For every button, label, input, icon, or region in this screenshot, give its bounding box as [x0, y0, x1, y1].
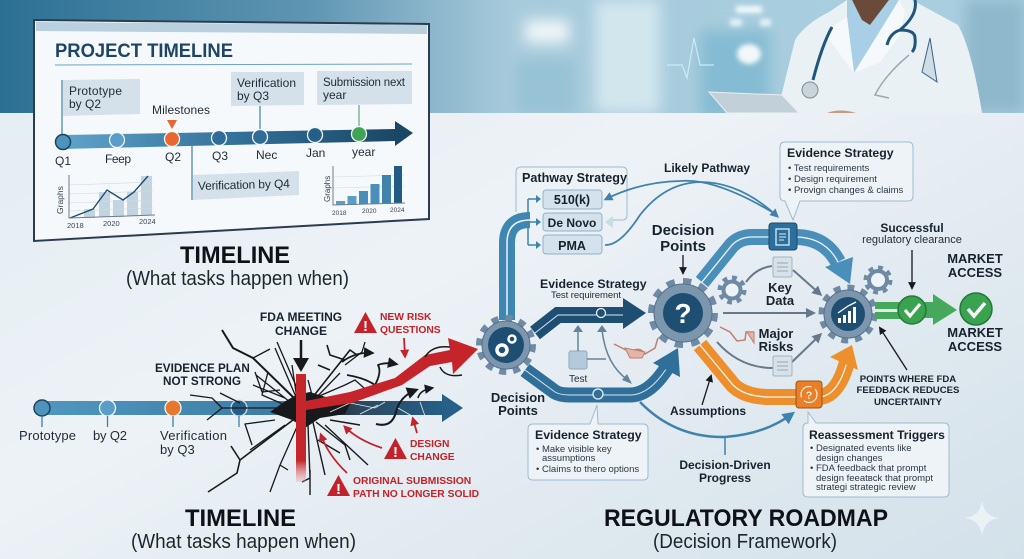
label: FDA meeting change [260, 310, 342, 372]
orange arrow [700, 345, 858, 397]
warning: original submission path: ! [336, 481, 341, 498]
callout: evidence strategy top [780, 142, 913, 220]
timeline labels: by Q3 [160, 442, 195, 457]
icon: sparkle [965, 501, 999, 536]
warning: original submission path: ORIGINAL SUBMISSION [353, 476, 471, 487]
warning: design change: ! [393, 444, 398, 461]
label: decision points left: Points [498, 403, 538, 418]
timeline labels: by Q2 [93, 428, 127, 443]
label: key data: Key [768, 280, 793, 295]
timeline arrow: year [352, 145, 375, 159]
timeline labels [19, 428, 227, 457]
milestone marker: Milestones [152, 103, 210, 117]
callout: reassessment triggers: strategi strategic review [816, 482, 916, 493]
warning: design change: CHANGE [410, 452, 455, 463]
timeline arrow: Nec [256, 148, 277, 162]
line chart: 2024 [139, 217, 156, 226]
label: decision points center [652, 222, 714, 273]
milestone callout: prototype [62, 79, 140, 136]
icon: major risks document [773, 356, 792, 376]
bar chart: 2024 [390, 207, 405, 214]
icon: reassessment box: ? [806, 390, 813, 402]
label: FDA meeting change: FDA MEETING [260, 310, 342, 324]
label: successful clearance [862, 221, 962, 288]
milestone callout: prototype: Prototype [69, 84, 122, 98]
risk squiggles [614, 327, 754, 358]
warning: new risk questions [354, 312, 441, 356]
line chart: Graphs [55, 186, 65, 214]
label: major risks [759, 326, 793, 354]
white fractures [330, 402, 425, 425]
label: market access top: MARKET [947, 251, 1003, 266]
milestone callout: submission: year [323, 88, 346, 102]
title: timeline lower: (What tasks happen when) [131, 531, 356, 553]
label: decision-driven progress [679, 458, 771, 485]
cracks [190, 330, 432, 495]
title: timeline upper: TIMELINE [180, 242, 290, 269]
label: decision points left [491, 390, 545, 418]
broken timeline [19, 310, 479, 500]
line chart: 2018 [67, 221, 84, 230]
label: market access bottom: ACCESS [948, 339, 1002, 354]
evidence strategy arrow [535, 277, 647, 333]
callout: reassessment triggers [803, 412, 949, 497]
evidence strategy arrow: Evidence Strategy [540, 277, 647, 291]
warning: design change: DESIGN [410, 439, 449, 450]
test node [569, 325, 632, 385]
panel: pathway strategy: Pathway Strategy [522, 171, 627, 185]
broken timeline bar [34, 394, 463, 427]
callout: reassessment triggers: Reassessment Triggers [809, 428, 945, 442]
gear: decision question: ? [674, 298, 692, 329]
bar chart [323, 166, 405, 217]
milestone callout: verification Q3 [231, 72, 304, 130]
likely pathway arrows [605, 161, 777, 245]
callout: evidence strategy top: Evidence Strategy [787, 146, 894, 160]
label: market access top: ACCESS [948, 265, 1002, 280]
callout: reassessment triggers: • Designated events like [810, 443, 912, 454]
title: regulatory roadmap [604, 505, 888, 553]
timeline arrow [55, 121, 413, 168]
title: timeline lower [131, 505, 356, 553]
icon: key data document [773, 257, 792, 277]
icon: market access check [960, 293, 992, 325]
label: market access bottom [947, 325, 1003, 354]
timeline arrow: Feep [105, 152, 131, 166]
label: market access bottom: MARKET [947, 325, 1003, 340]
tablet [709, 92, 799, 113]
callout: evidence strategy top: • Design requirement [788, 174, 877, 185]
icon: ECG line [667, 38, 714, 78]
line chart [55, 175, 156, 230]
label: major risks: Risks [759, 339, 793, 354]
bar chart: Graphs [323, 176, 332, 202]
callout: evidence strategy top: • Provign changes & claims [788, 185, 904, 196]
warning: original submission path: PATH NO LONGER SOLID [353, 489, 479, 500]
label: successful clearance: regulatory clearance [862, 234, 962, 246]
label: decision points left: Decision [491, 390, 545, 405]
callout: reassessment triggers: design changes [816, 453, 883, 464]
timeline labels: Prototype [19, 428, 76, 443]
roadmap diagram [480, 142, 1003, 497]
label: key data [766, 280, 795, 308]
panel: project timeline monitor [34, 20, 429, 241]
milestone callout: prototype: by Q2 [69, 97, 101, 111]
warning: design change [345, 419, 455, 463]
timeline arrow: Jan [306, 146, 325, 160]
gear: start [480, 319, 532, 371]
label: decision points center: Points [660, 238, 706, 255]
title: regulatory roadmap: REGULATORY ROADMAP [604, 505, 888, 532]
milestone callout: verification Q4: Verification by Q4 [198, 177, 290, 193]
label: assumptions [670, 376, 746, 418]
callout: evidence strategy bottom: • Make visible key [536, 444, 612, 455]
milestone callout: verification Q3: Verification [237, 76, 296, 90]
title: timeline lower: TIMELINE [185, 505, 296, 532]
warning: new risk questions: ! [363, 318, 368, 335]
label: FDA feedback points: UNCERTAINTY [874, 397, 943, 408]
callout: reassessment triggers: • FDA feedback that prompt [810, 463, 927, 474]
title: regulatory roadmap: (Decision Framework) [653, 531, 837, 553]
timeline arrow: Q3 [212, 149, 228, 163]
timeline arrow: Q1 [55, 154, 71, 168]
label: successful clearance: Successful [880, 221, 944, 235]
label: decision-driven progress: Progress [699, 471, 751, 485]
title: timeline upper [126, 242, 349, 290]
upper blue arrow [702, 237, 853, 284]
panel: pathway strategy [516, 167, 627, 254]
pathway tube [507, 220, 530, 320]
likely pathway arrows: Likely Pathway [664, 161, 750, 175]
label: evidence plan: NOT STRONG [163, 375, 241, 388]
timeline arrow: Q2 [165, 150, 181, 164]
callout: evidence strategy bottom: assumptions [542, 453, 596, 464]
label: decision-driven progress: Decision-Driven [679, 458, 771, 472]
warning: original submission path [321, 435, 479, 500]
label: evidence plan [155, 362, 250, 388]
panel: pathway strategy: PMA [558, 239, 586, 253]
icon: checklist box [769, 223, 797, 250]
milestone callout: submission [317, 71, 412, 128]
milestone callout: verification Q3: by Q3 [237, 89, 269, 103]
timeline labels: Verification [160, 428, 227, 443]
line chart: 2020 [103, 219, 120, 228]
gear: progress chart [822, 288, 874, 340]
bar chart: 2020 [362, 208, 377, 215]
label: FDA meeting change: CHANGE [275, 324, 327, 338]
callout: evidence strategy bottom: • Claims to thero options [536, 464, 639, 475]
label: major risks: Major [759, 326, 793, 341]
warning: new risk questions: NEW RISK [380, 312, 432, 323]
label: market access top [947, 251, 1003, 280]
success arrow [875, 294, 957, 325]
milestone marker [152, 103, 210, 129]
label: assumptions: Assumptions [670, 404, 746, 418]
red vertical marker [296, 374, 306, 482]
panel: pathway strategy: 510(k) [554, 193, 590, 207]
gear: small key data [720, 278, 744, 302]
label: FDA feedback points: FEEDBACK REDUCES [857, 385, 960, 396]
lower blue arrow [525, 348, 680, 399]
evidence strategy arrow: Test requirement [551, 290, 621, 301]
callout: evidence strategy bottom: Evidence Strategy [535, 428, 642, 442]
title: timeline upper: (What tasks happen when) [126, 268, 349, 290]
label: key data: Data [766, 293, 795, 308]
test node: Test [569, 374, 588, 385]
icon: reassessment box [796, 381, 822, 408]
label: FDA feedback points: POINTS WHERE FDA [860, 374, 956, 385]
callout: evidence strategy bottom [528, 405, 648, 480]
milestone callout: verification Q4 [192, 146, 299, 200]
red rising arrow [306, 338, 478, 410]
label: evidence plan: EVIDENCE PLAN [155, 362, 250, 375]
callout: evidence strategy top: • Test requirements [788, 163, 870, 174]
heading: project timeline: PROJECT TIMELINE [55, 41, 233, 62]
gear: small upper [866, 268, 890, 292]
gear: decision question [652, 282, 714, 344]
callout: reassessment triggers: design feeatвck that prompt [816, 473, 933, 484]
warning: new risk questions: QUESTIONS [380, 325, 441, 336]
label: FDA feedback points [857, 328, 960, 408]
doctor [777, 0, 982, 113]
header photo: hospital corridor with doctor [0, 0, 1024, 120]
bar chart: 2018 [332, 210, 347, 217]
gray connectors [717, 266, 820, 368]
panel: pathway strategy: De Novo [548, 216, 596, 230]
label: decision points center: Decision [652, 222, 714, 239]
milestone callout: submission: Submission next [323, 77, 406, 89]
decision-driven curve [640, 402, 792, 455]
